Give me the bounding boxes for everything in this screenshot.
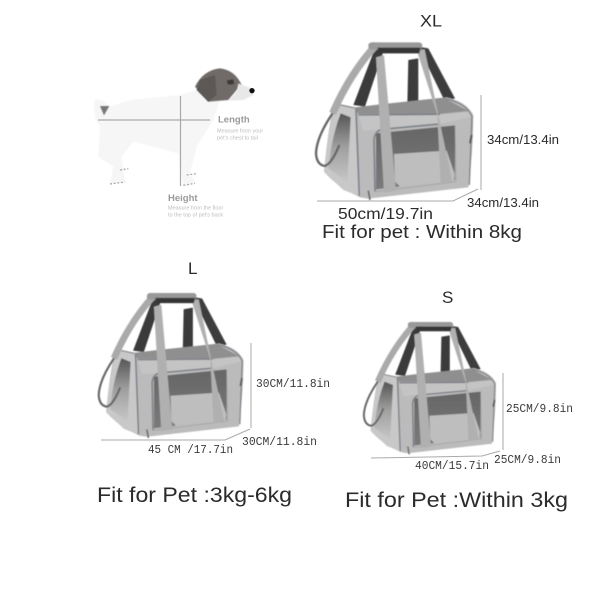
depth XL: 34cm/13.4in	[467, 195, 539, 210]
length label: Length	[218, 114, 250, 126]
dimension lines L	[101, 343, 251, 440]
length description: pet's chest to tail	[217, 136, 258, 142]
dog measuring guide	[94, 68, 263, 218]
width L: 45 CM /17.7in	[148, 443, 233, 457]
L heading: L	[188, 259, 197, 278]
fit note L: Fit for Pet :3kg-6kg	[97, 484, 292, 507]
S heading: S	[442, 288, 453, 307]
depth S: 25CM/9.8in	[494, 454, 561, 467]
height description: to the top of pet's back	[168, 212, 223, 218]
bag photo S	[364, 322, 496, 454]
panel: XL carrier	[316, 12, 559, 242]
height label: Height	[168, 193, 198, 204]
XL heading: XL	[420, 12, 442, 30]
fit note XL: Fit for pet : Within 8kg	[322, 222, 522, 242]
height S: 25CM/9.8in	[506, 403, 573, 416]
height description: Measure from the floor	[168, 206, 223, 212]
fit note S: Fit for Pet :Within 3kg	[345, 489, 568, 512]
length description: Measure from your	[217, 128, 263, 134]
length and height lines	[98, 96, 210, 186]
width S: 40CM/15.7in	[415, 460, 489, 473]
panel: L carrier	[97, 259, 330, 507]
bag photo XL	[316, 42, 473, 200]
bag photo L	[99, 293, 243, 438]
depth L: 30CM/11.8in	[242, 435, 317, 449]
height XL: 34cm/13.4in	[487, 132, 559, 147]
dimension lines S	[371, 373, 503, 458]
width XL: 50cm/19.7in	[338, 206, 433, 223]
height L: 30CM/11.8in	[256, 377, 330, 391]
panel: S carrier	[345, 288, 573, 512]
dog illustration	[94, 68, 255, 186]
dimension lines XL	[317, 95, 481, 201]
